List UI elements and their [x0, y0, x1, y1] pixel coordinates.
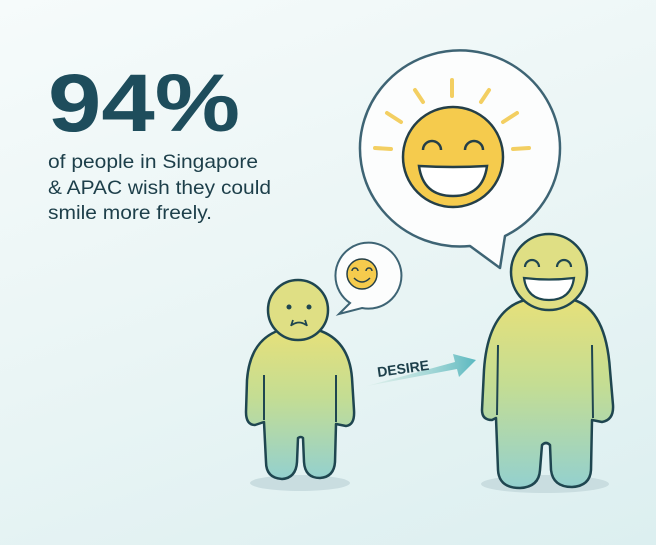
big speech bubble with laughing smiley [360, 50, 560, 268]
text block: description: of people in Singapore [48, 151, 258, 173]
arrow: desire: DESIRE [376, 357, 430, 380]
text block: description [48, 151, 271, 224]
right figure: happy person [481, 234, 613, 493]
text block: description: smile more freely. [48, 202, 212, 224]
left figure: unhappy person [246, 280, 354, 491]
arrow: desire [367, 354, 476, 386]
title: 94%: 94% [48, 58, 240, 149]
small speech bubble [335, 243, 401, 314]
text block: description: & APAC wish they could [48, 177, 271, 199]
